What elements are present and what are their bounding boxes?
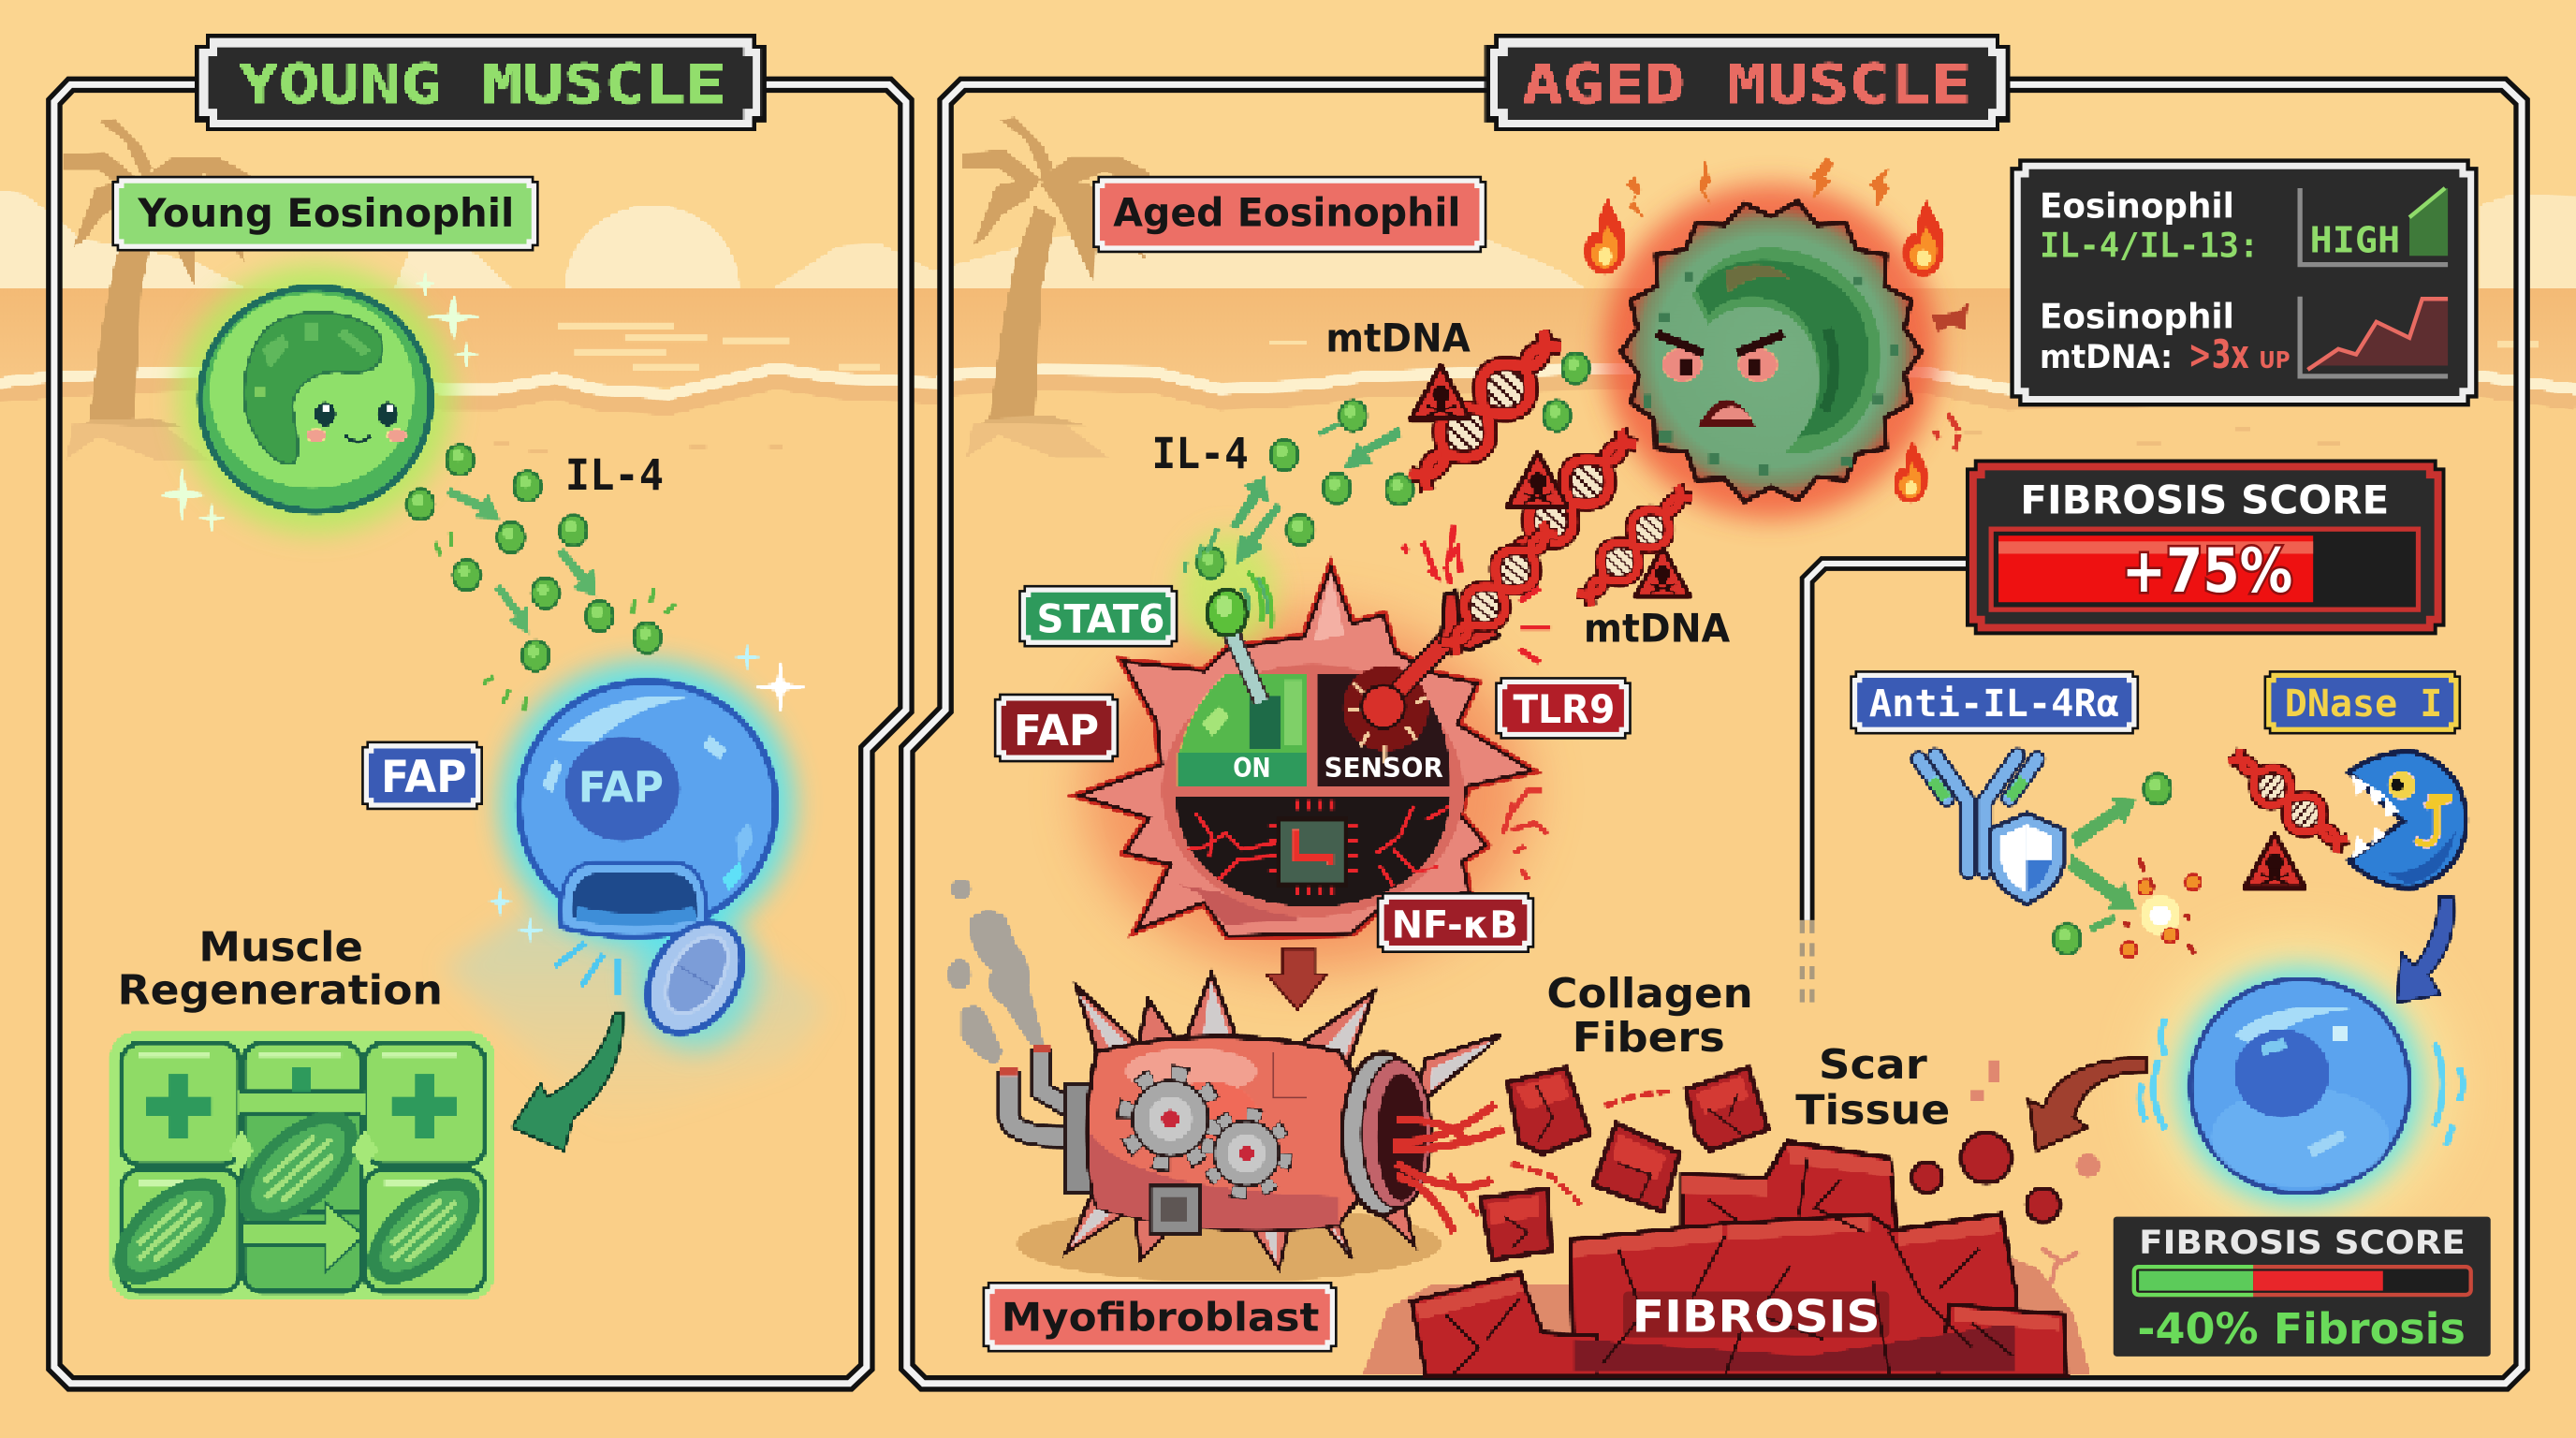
bar: fibrosis reduced	[2134, 1267, 2471, 1295]
text: IL-4 readout label: Eosinophil	[2040, 186, 2234, 227]
arrows: IL-4 flow, young	[435, 488, 675, 710]
icon: ejected capsule	[624, 902, 766, 1054]
arrow: signal to myofibroblast	[1266, 948, 1325, 1009]
label: FAP inside cell: FAP	[578, 762, 664, 812]
icon: FAP cell, young	[516, 679, 779, 936]
icon: TLR9 wrench lever holding mtDNA	[1362, 515, 1566, 728]
arrow: FAP to muscle regeneration	[513, 1014, 622, 1151]
icon: fibrosis scar pile	[1364, 1142, 2089, 1375]
icon: explosion burst	[2122, 858, 2201, 957]
arrows: collagen fiber dashes	[1449, 1091, 1671, 1216]
bar: fibrosis +75%	[1991, 529, 2419, 609]
label: STAT6: STAT6	[1036, 596, 1164, 642]
icon: myofibroblast machine	[1001, 975, 1503, 1282]
label: muscle regeneration: Regeneration	[117, 966, 443, 1014]
label: IL-4, aged: IL-4	[1151, 429, 1249, 478]
icon: smoke	[948, 879, 1045, 1064]
icon: activated FAP spiky cell	[1080, 568, 1531, 936]
label: young eosinophil	[117, 181, 534, 246]
icon: regenerating muscle grid	[95, 1032, 499, 1304]
icon: young eosinophil cell	[198, 285, 433, 514]
bar: fibrosis +75%: +75%	[2122, 536, 2292, 607]
label: collagen fibers: Collagen	[1546, 970, 1753, 1018]
label: IL-4, young: IL-4	[565, 450, 664, 500]
label: FAP, young: FAP	[381, 752, 466, 803]
title: young muscle	[204, 43, 757, 124]
label: fibrosis on pile: FIBROSIS	[1632, 1292, 1881, 1343]
label: muscle regeneration: Muscle	[198, 924, 363, 972]
icon: healthy FAP cell	[2188, 976, 2411, 1196]
text: mtDNA readout label: Eosinophil	[2040, 296, 2234, 336]
text: IL-4 readout label: IL-4/IL-13:	[2040, 226, 2259, 266]
label: scar tissue: Scar	[1819, 1041, 1927, 1089]
panel: fibrosis score +75%	[1973, 466, 2438, 627]
arrows: blocked IL-4	[2069, 797, 2136, 932]
icon: cell vibration arcs	[2140, 1019, 2463, 1145]
heading: fibrosis score: FIBROSIS SCORE	[2020, 477, 2389, 522]
text: mtDNA readout label: mtDNA:	[2040, 338, 2173, 376]
icon: cyan sparkles and release dashes	[487, 645, 806, 994]
icon: flames around aged eosinophil	[1585, 157, 1969, 503]
chart: IL-4 high	[2300, 188, 2448, 265]
connector frame from fibrosis score to treatment zone	[1802, 564, 1967, 1003]
label: DNase I: DNase I	[2285, 682, 2442, 726]
text: mtDNA readout label: >3x	[2188, 331, 2249, 377]
label: muscle regeneration	[117, 924, 443, 1014]
arrow: treatment to healthy FAP cell	[2397, 897, 2453, 1003]
text: mtDNA readout label	[2040, 296, 2291, 377]
icon: collagen fiber blocks	[1481, 1068, 1767, 1259]
arrows: IL-4 flow, aged	[1184, 424, 1401, 614]
panel: fibrosis score -40%	[2114, 1217, 2491, 1357]
label: FAP, aged	[999, 698, 1114, 757]
icon: aged eosinophil	[1621, 202, 1921, 501]
icon: IL-4 particles, aged	[1196, 352, 1590, 580]
icon: inflammation splatter near TLR9	[1503, 790, 1547, 879]
label: young eosinophil: Young Eosinophil	[137, 190, 514, 236]
label: myofibroblast	[988, 1286, 1332, 1347]
label: scar tissue: Tissue	[1795, 1086, 1950, 1134]
icon: DNA fragment and hazard near DNase	[2223, 741, 2354, 888]
text: -40% fibrosis: -40% Fibrosis	[2137, 1304, 2466, 1354]
title: young muscle: YOUNG MUSCLE	[238, 52, 726, 116]
label: mtDNA, lower: mtDNA	[1584, 605, 1731, 651]
label: collagen fibers: Fibers	[1573, 1014, 1725, 1062]
icon: anti-IL-4R alpha antibody	[1919, 756, 2037, 871]
label: FAP, aged: FAP	[1014, 706, 1099, 756]
title: aged muscle	[1493, 43, 2001, 124]
icon: IL-4 blocked particles	[2052, 772, 2173, 956]
icon: IL-4 particles, young	[406, 444, 662, 672]
text: IL-4 readout label	[2040, 186, 2259, 266]
panel: aged muscle frame	[907, 84, 2522, 1384]
label: scar tissue	[1795, 1041, 1950, 1134]
icon: young sparkles	[157, 271, 479, 532]
label: aged eosinophil: Aged Eosinophil	[1113, 189, 1460, 235]
title: aged muscle: AGED MUSCLE	[1522, 52, 1971, 116]
label: aged eosinophil	[1097, 181, 1482, 248]
icon: scar debris pebbles	[1912, 1062, 2100, 1284]
heading: fibrosis score treated: FIBROSIS SCORE	[2139, 1224, 2466, 1262]
label: DNase I	[2269, 675, 2456, 729]
label: TLR9: TLR9	[1513, 686, 1615, 732]
label: collagen fibers	[1546, 970, 1753, 1062]
text: mtDNA readout label: UP	[2259, 346, 2291, 374]
label: switch state ON: ON	[1233, 753, 1271, 784]
arrow: FAP cell to scar tissue	[2029, 1058, 2145, 1151]
label: myofibroblast: Myofibroblast	[1002, 1295, 1319, 1341]
label: anti-IL-4R alpha: Anti-IL-4Rα	[1869, 682, 2119, 726]
label: mtDNA, top: mtDNA	[1325, 315, 1471, 361]
panel: young muscle frame	[54, 84, 906, 1384]
soft glow layer	[178, 184, 2452, 1234]
icon: mtDNA fragments with hazard signs	[1399, 322, 1699, 613]
icon: STAT6 lever	[1206, 572, 1272, 701]
chart: mtDNA rising	[2300, 297, 2448, 376]
icon: DNase I chomper	[2349, 752, 2466, 888]
chart: IL-4 high: HIGH	[2310, 219, 2400, 261]
label: SENSOR: SENSOR	[1325, 753, 1443, 784]
panel: eosinophil readout	[2017, 166, 2471, 399]
icon: shield	[1989, 814, 2063, 903]
label: NF-kB: NF-κB	[1392, 902, 1518, 946]
